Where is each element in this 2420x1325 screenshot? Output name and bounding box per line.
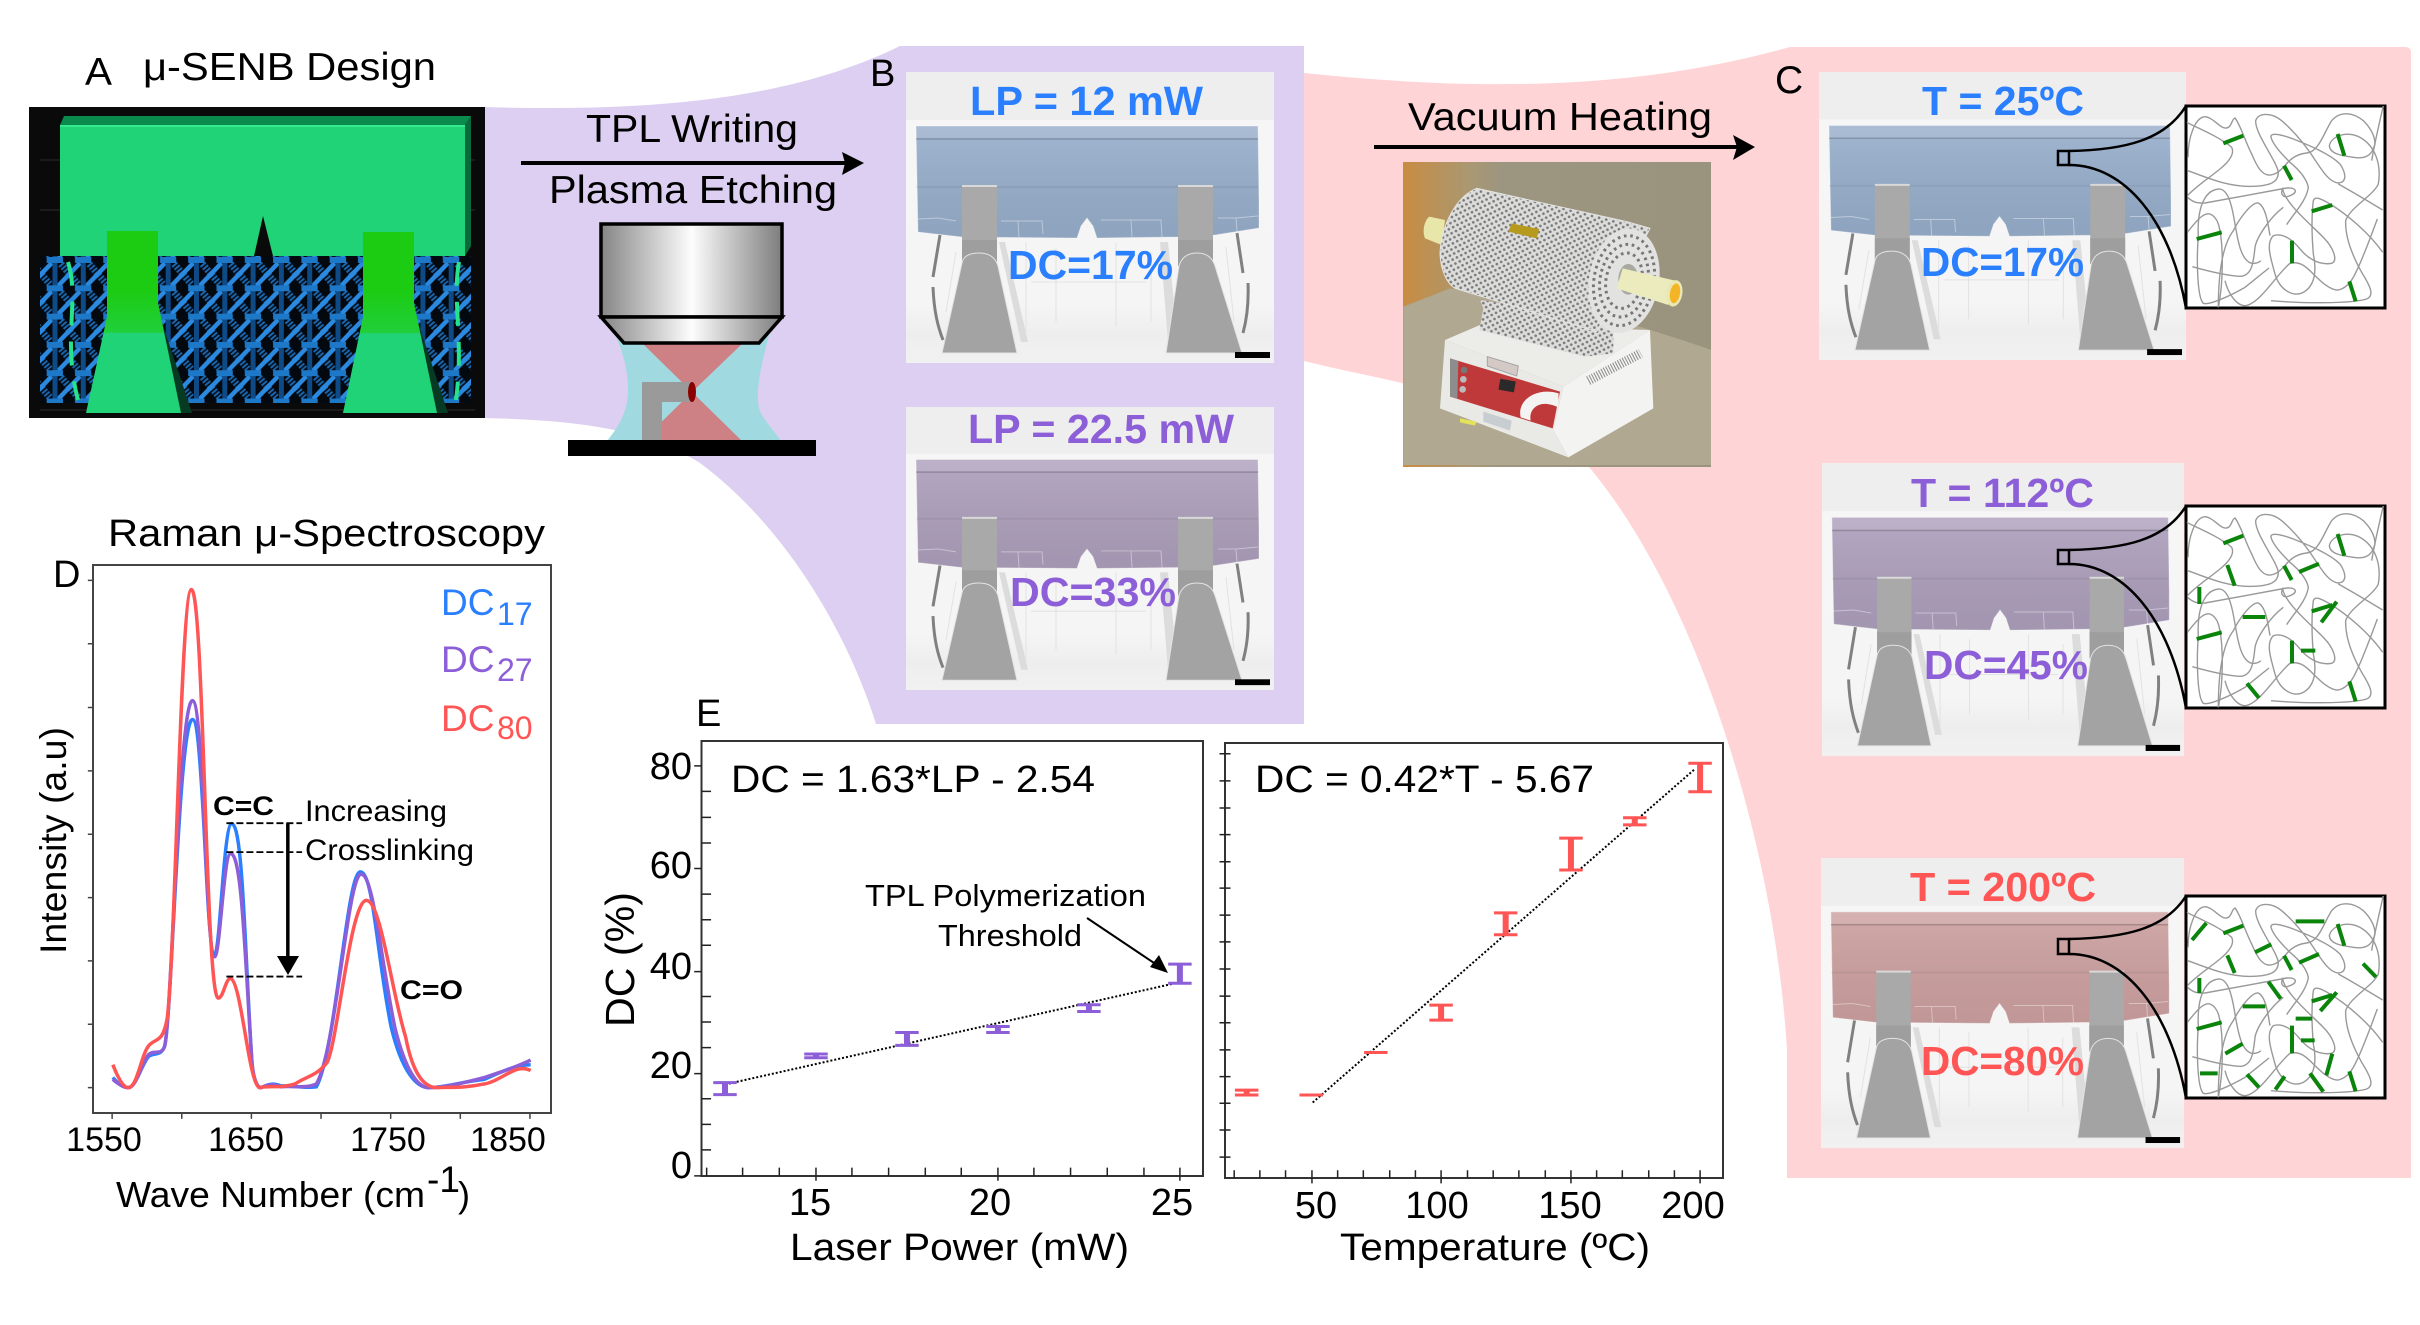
x axis title: wave number: ) bbox=[458, 1174, 470, 1215]
x tick labels: temperature: 50 bbox=[1295, 1185, 1337, 1227]
panel letter D: D bbox=[53, 554, 80, 596]
trend line bbox=[1313, 770, 1694, 1103]
beam block bbox=[60, 116, 471, 256]
temperature label: T = 112ºC bbox=[1911, 470, 2094, 516]
SEM image: T 25 C bbox=[1819, 72, 2186, 360]
x tick labels: wave number bbox=[66, 1121, 546, 1159]
spectrum DC80 bbox=[113, 590, 531, 1088]
SEM image: LP 12 mW bbox=[906, 72, 1274, 363]
label C=C: C=C bbox=[213, 791, 274, 821]
panel A: 3D model render of the micro-SENB specimen bbox=[29, 107, 485, 418]
x axis title: wave number bbox=[116, 1159, 470, 1215]
axis ticks bbox=[88, 580, 530, 1119]
SEM image: T 200 C bbox=[1821, 858, 2184, 1148]
vacuum heating label and arrow bbox=[1374, 96, 1755, 160]
left pillar bbox=[86, 231, 181, 413]
legend: DC bbox=[441, 639, 494, 680]
spectrum DC17 bbox=[113, 719, 531, 1088]
axis ticks bbox=[1220, 754, 1700, 1183]
label increasing crosslinking: Crosslinking bbox=[305, 834, 474, 867]
network inset: medium crosslinks bbox=[2186, 506, 2385, 708]
panel: pink vacuum heating background bbox=[1304, 47, 2411, 1178]
y tick labels: DC: 80 bbox=[650, 746, 692, 788]
SEM image: LP 22.5 mW: DC=33% bbox=[1010, 569, 1176, 615]
magnifier callout bbox=[2058, 106, 2186, 308]
chart: DC vs laser power bbox=[694, 741, 1203, 1181]
vacuum heating label and arrow: Vacuum Heating bbox=[1408, 96, 1712, 139]
chart: DC vs temperature bbox=[1220, 743, 1723, 1183]
spectrum DC27 bbox=[113, 701, 531, 1088]
y tick labels: DC: 60 bbox=[650, 845, 692, 887]
degree of conversion label: DC=17% bbox=[1921, 239, 2084, 285]
y tick labels: DC bbox=[650, 746, 692, 1187]
panel letter E: E bbox=[696, 693, 721, 735]
icon: microscope objective writing on substrate bbox=[568, 224, 816, 456]
temperature label: T = 200ºC bbox=[1910, 864, 2096, 910]
x axis title: temperature: Temperature (ºC) bbox=[1340, 1227, 1650, 1269]
label increasing crosslinking: Increasing bbox=[305, 795, 447, 828]
SEM image: LP 12 mW: LP = 12 mW bbox=[970, 78, 1203, 124]
x tick labels: wave number: 1850 bbox=[470, 1121, 546, 1159]
network inset: few crosslinks bbox=[2186, 106, 2385, 308]
x tick labels: wave number: 1550 bbox=[66, 1121, 142, 1159]
label C=O: C=O bbox=[400, 975, 463, 1005]
SEM image: T 112 C bbox=[1822, 463, 2184, 756]
data points bbox=[1235, 763, 1712, 1095]
heading: Raman spectroscopy: Raman μ-Spectroscopy bbox=[108, 513, 545, 555]
panel letter B: B bbox=[870, 53, 895, 95]
x tick labels: wave number: 1750 bbox=[350, 1121, 426, 1159]
legend: 80 bbox=[497, 710, 533, 746]
y tick labels: DC: 20 bbox=[650, 1045, 692, 1087]
label increasing crosslinking bbox=[305, 795, 474, 867]
y tick labels: DC: 40 bbox=[650, 946, 692, 988]
legend: 17 bbox=[497, 596, 533, 632]
axis ticks bbox=[694, 766, 1180, 1181]
degree of conversion label: DC=45% bbox=[1924, 642, 2088, 688]
SEM image: LP 22.5 mW bbox=[906, 406, 1274, 690]
equation: DC = 1.63*LP - 2.54 bbox=[731, 759, 1095, 801]
panel C row 3: T 200C bbox=[1821, 858, 2385, 1148]
degree of conversion label: DC=80% bbox=[1921, 1038, 2084, 1084]
right pillar bbox=[343, 232, 437, 413]
temperature label: T = 25ºC bbox=[1922, 78, 2084, 124]
heading: micro-SENB design: μ-SENB Design bbox=[143, 46, 436, 89]
panel: purple TPL writing background bbox=[484, 46, 1304, 724]
arrow: decreasing C=C peak bbox=[286, 823, 290, 959]
SEM image: LP 12 mW: DC=17% bbox=[1008, 242, 1173, 288]
annotation: polymerization threshold bbox=[865, 878, 1168, 973]
annotation: polymerization threshold: TPL Polymerization bbox=[865, 878, 1146, 913]
TPL writing process label and arrow: Plasma Etching bbox=[549, 169, 837, 212]
y axis title: DC percent: DC (%) bbox=[597, 892, 643, 1027]
network inset: dense crosslinks bbox=[2186, 896, 2385, 1098]
y axis title: intensity: Intensity (a.u) bbox=[33, 727, 74, 954]
magnifier callout bbox=[2058, 506, 2186, 708]
x tick labels: laser power: 25 bbox=[1151, 1182, 1193, 1224]
panel C row 1: T 25C bbox=[1819, 72, 2385, 360]
equation: DC = 0.42*T - 5.67 bbox=[1255, 759, 1594, 801]
crosslinking dashed levels bbox=[226, 823, 302, 977]
TPL writing process label and arrow bbox=[521, 108, 864, 212]
x tick labels: laser power: 15 bbox=[789, 1182, 831, 1224]
x tick labels: laser power: 20 bbox=[969, 1182, 1011, 1224]
x axis title: wave number: Wave Number (cm bbox=[116, 1174, 425, 1215]
TPL writing process label and arrow: TPL Writing bbox=[586, 108, 798, 151]
x tick labels: temperature: 100 bbox=[1405, 1185, 1469, 1227]
chart: Raman spectra bbox=[88, 565, 551, 1119]
trend line bbox=[725, 982, 1180, 1084]
magnifier callout bbox=[2058, 896, 2186, 1098]
panel C row 2: T 112C bbox=[1822, 463, 2385, 756]
x tick labels: temperature: 150 bbox=[1538, 1185, 1602, 1227]
panel letter A: A bbox=[85, 51, 112, 94]
SEM image: LP 22.5 mW: LP = 22.5 mW bbox=[968, 406, 1234, 452]
legend: DC bbox=[441, 582, 494, 623]
x axis title: laser power: Laser Power (mW) bbox=[790, 1227, 1129, 1269]
legend: DC bbox=[441, 698, 494, 739]
panel letter C: C bbox=[1775, 59, 1803, 102]
photo: tube furnace bbox=[1403, 162, 1712, 467]
x tick labels: wave number: 1650 bbox=[208, 1121, 284, 1159]
x axis title: wave number: -1 bbox=[427, 1159, 460, 1200]
x tick labels: laser power bbox=[789, 1182, 1193, 1224]
legend bbox=[441, 582, 533, 746]
y tick labels: DC: 0 bbox=[671, 1145, 692, 1187]
legend: 27 bbox=[497, 652, 533, 688]
x tick labels: temperature: 200 bbox=[1661, 1185, 1725, 1227]
x tick labels: temperature bbox=[1295, 1185, 1725, 1227]
data points bbox=[713, 964, 1192, 1095]
lattice support bbox=[40, 256, 471, 403]
annotation: polymerization threshold: Threshold bbox=[938, 918, 1082, 953]
